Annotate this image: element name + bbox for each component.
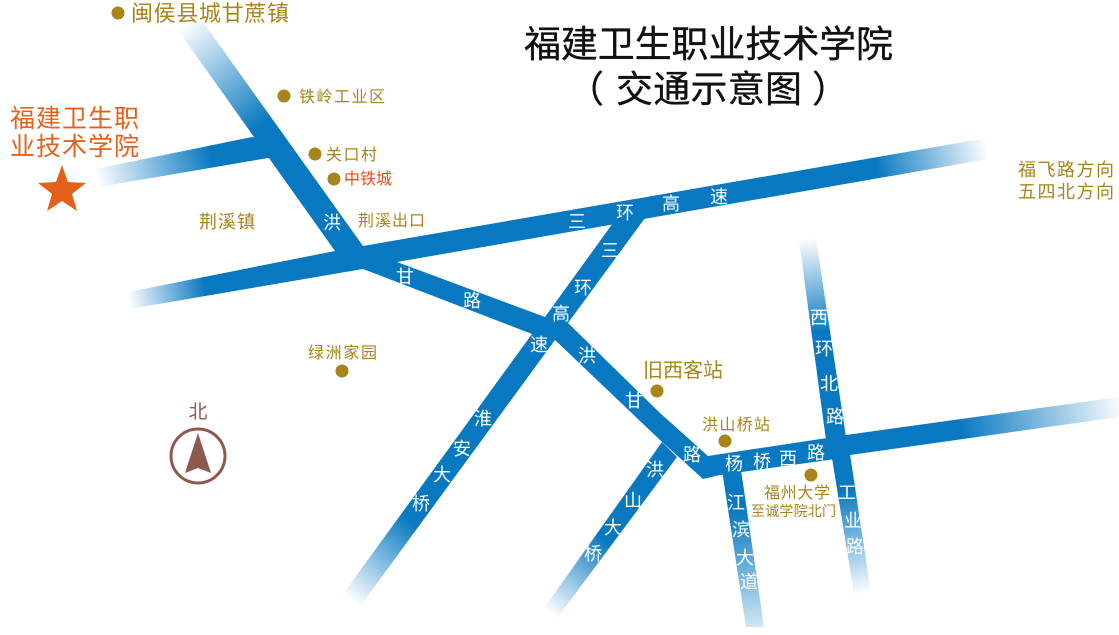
- title: 交通示意图: [616, 69, 802, 110]
- place: Fuzhou University: [751, 468, 836, 519]
- road names: 环: [574, 278, 592, 298]
- road names: 路: [846, 537, 864, 557]
- road: West ring north: [798, 232, 846, 440]
- place: Hongshanqiao: 洪山桥站: [702, 416, 770, 434]
- road: ring expressway: [113, 137, 1000, 310]
- road: Yangqiao west road east part: [827, 397, 1119, 460]
- road names: 杨: [725, 454, 743, 474]
- road names: 洪: [323, 213, 341, 233]
- road names: 路: [463, 291, 481, 311]
- road names: 洪: [578, 346, 596, 366]
- place: Jingxi exit: 荆溪出口: [358, 212, 425, 230]
- road names: 江: [727, 493, 745, 513]
- road: branch to school: [85, 137, 285, 188]
- road names: 西: [779, 449, 797, 469]
- school label: [10, 105, 139, 161]
- road names: 环: [815, 339, 833, 359]
- road: Huaian bridge: [330, 334, 555, 612]
- road names: 三: [568, 212, 586, 232]
- road names: 西: [810, 308, 828, 328]
- road names: 大: [736, 548, 754, 568]
- direction label: [1018, 160, 1114, 202]
- road names: 路: [807, 443, 825, 463]
- road: Gongye road: [832, 454, 872, 600]
- direction label: 福飞路方向: [1018, 160, 1114, 180]
- road names: 桥: [584, 544, 602, 564]
- road names: 高: [552, 304, 570, 324]
- icon: north compass: [171, 401, 225, 483]
- road names: 道: [740, 572, 758, 592]
- title: ）: [812, 69, 849, 110]
- road names: 淮: [474, 409, 492, 429]
- road names: 山: [624, 491, 642, 511]
- title: 福建卫生职业技术学院: [524, 24, 893, 65]
- road names: 路: [826, 407, 844, 427]
- road names: 大: [433, 465, 451, 485]
- road names: 北: [820, 374, 838, 394]
- road: Ganlu southeast: [345, 246, 850, 479]
- road names: 业: [844, 511, 862, 531]
- road names: 速: [710, 187, 728, 207]
- road names: 滨: [732, 520, 750, 540]
- road names: 甘: [625, 391, 643, 411]
- road: Jiangbin avenue: [722, 470, 764, 627]
- road names: 洪: [646, 460, 664, 480]
- road names: 桥: [412, 494, 430, 514]
- road: Hongshan bridge: [532, 442, 677, 625]
- place: Fuzhou University: 福州大学: [764, 484, 830, 502]
- road names: 甘: [396, 267, 414, 287]
- place: Tieling: 铁岭工业区: [299, 88, 385, 106]
- road names: 高: [662, 194, 680, 214]
- road names: 桥: [753, 452, 771, 472]
- road names: [323, 187, 864, 592]
- road names: 环: [616, 203, 634, 223]
- title: [524, 24, 893, 110]
- place: Fuzhou University: 至诚学院北门: [751, 503, 836, 519]
- road names: 三: [601, 241, 619, 261]
- place: old west station: [643, 359, 723, 398]
- school label: 福建卫生职: [10, 105, 139, 133]
- road: north Honggan road: [173, 22, 363, 262]
- road names: 速: [530, 335, 548, 355]
- place: Zhongtiecheng: 中铁城: [344, 170, 392, 188]
- road names: 工: [838, 483, 856, 503]
- direction label: 五四北方向: [1018, 182, 1114, 202]
- road names: 安: [453, 439, 471, 459]
- road names: 大: [604, 518, 622, 538]
- icon: school star: [38, 165, 86, 211]
- place: Lvzhou: 绿洲家园: [308, 344, 377, 362]
- road names: 路: [683, 445, 701, 465]
- title: （: [567, 69, 604, 110]
- place: Lvzhou: [308, 344, 377, 378]
- place: Hongshanqiao: [702, 416, 770, 448]
- place: old west station: 旧西客站: [643, 359, 723, 382]
- place: Jingxi town: 荆溪镇: [199, 212, 255, 232]
- school label: 业技术学院: [10, 133, 139, 161]
- road: ring link: [532, 215, 645, 340]
- icon: north compass: 北: [188, 401, 208, 423]
- place: Minhou Ganzhe: 闽侯县城甘蔗镇: [131, 1, 289, 26]
- place: Guankou: 关口村: [326, 146, 377, 164]
